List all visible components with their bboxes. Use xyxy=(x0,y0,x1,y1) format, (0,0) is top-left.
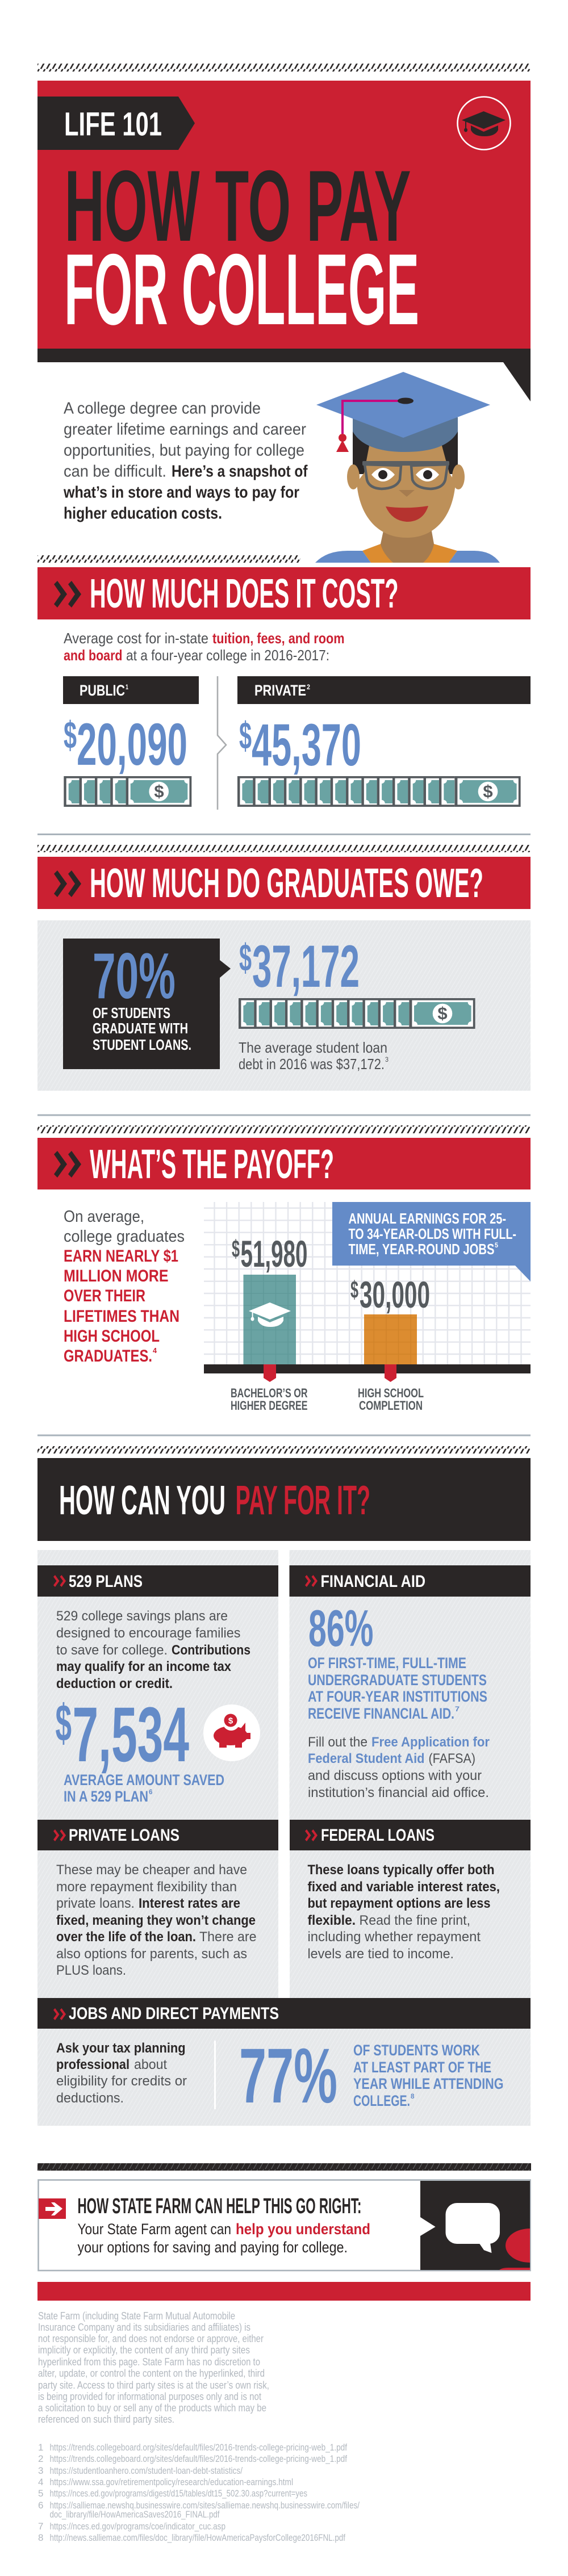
disclaimer: a solicitation to buy or sell any of the products which may be xyxy=(38,2402,266,2414)
payoff statement: 4 xyxy=(153,1346,157,1355)
disclaimer: referenced on such third party sites. xyxy=(38,2414,174,2425)
source list: 2 xyxy=(38,2453,43,2464)
cost description xyxy=(64,630,344,664)
source list: doc_library/file/HowAmericaSaves2016_FINAL.pdf xyxy=(50,2509,220,2520)
source list: https://trends.collegeboard.org/sites/default/files/2016-trends-college-pricing-web_1.pdf xyxy=(50,2453,347,2464)
title xyxy=(64,149,419,346)
axis label: high school xyxy=(358,1386,424,1413)
source list: https://studentloanhero.com/student-loan-debt-statistics/ xyxy=(50,2465,243,2476)
value: 30,000 xyxy=(350,1274,430,1316)
payoff statement: HIGH SCHOOL xyxy=(64,1327,160,1346)
text: FAFSA xyxy=(308,1735,490,1800)
call to action heading: HOW STATE FARM CAN HELP THIS GO RIGHT: xyxy=(77,2194,361,2218)
text: private loans: These may be cheaper and have xyxy=(56,1862,247,1878)
value: 51,980: $ xyxy=(232,1235,240,1263)
callout: annual earnings: TO 34-YEAR-OLDS WITH FULL- xyxy=(349,1225,516,1242)
call to action text: help you understand xyxy=(236,2221,370,2238)
debt caption: debt in 2016 was $37,172. xyxy=(239,1055,385,1073)
intro text xyxy=(63,399,308,522)
text: private loans xyxy=(56,1862,257,1978)
LIFE 101 tag: LIFE 101 xyxy=(64,106,162,143)
footer red bar xyxy=(37,2282,531,2301)
speech bubble block xyxy=(420,2181,530,2270)
heading: private loans: PRIVATE LOANS xyxy=(69,1826,179,1845)
text: private loans: over the life of the loan. xyxy=(56,1929,196,1945)
section heading: pay for it xyxy=(37,1458,531,1541)
intro text: can be difficult. xyxy=(64,462,166,480)
stat: 86 percent: 86% xyxy=(308,1600,374,1657)
text: 529 description: Contributions xyxy=(172,1643,250,1658)
caption: financial aid recipients: RECEIVE FINANCIAL AID. xyxy=(308,1705,454,1722)
baseline and markers xyxy=(204,1364,531,1382)
callout: 70 percent xyxy=(63,939,231,1069)
amount: 7,534: $ xyxy=(56,1694,72,1752)
disclaimer xyxy=(38,2310,269,2425)
intro text: opportunities, but paying for college xyxy=(64,441,304,459)
payoff statement: GRADUATES. xyxy=(64,1347,152,1366)
source list: https://nces.ed.gov/programs/coe/indicator_cuc.asp xyxy=(50,2521,225,2532)
debt amount: $ xyxy=(239,936,252,979)
icon: debt money stack: $ xyxy=(437,1003,448,1023)
source list: http://news.salliemae.com/files/doc_library/file/HowAmericaPaysforCollege2016FNL.pdf xyxy=(50,2532,345,2543)
private label: 2 xyxy=(307,683,310,691)
panel: state farm call to action xyxy=(39,2180,531,2271)
caption: financial aid recipients: UNDERGRADUATE STUDENTS xyxy=(308,1672,487,1689)
bar: high school xyxy=(364,1314,417,1364)
caption: students work xyxy=(353,2042,503,2109)
disclaimer: party site. Access to third party sites is at the user’s own risk, xyxy=(38,2380,269,2391)
text: private loans: PLUS loans. xyxy=(56,1963,126,1978)
text: 529 description: designed to encourage families xyxy=(56,1626,241,1641)
cost description: at a four-year college in 2016-2017: xyxy=(126,647,329,664)
caption: students work: COLLEGE. xyxy=(353,2092,410,2109)
disclaimer: alter, update, or control the content on the hyperlinked, third xyxy=(38,2368,265,2379)
heading: 529 plans xyxy=(37,1565,278,1597)
icon: piggy bank: $ xyxy=(228,1716,233,1726)
heading: federal loans xyxy=(290,1820,531,1850)
icon: piggy bank xyxy=(203,1704,260,1761)
source list: https://nces.ed.gov/programs/digest/d15/tables/dt15_502.30.asp?current=yes xyxy=(50,2488,307,2499)
caption: students work: AT LEAST PART OF THE xyxy=(353,2059,491,2076)
chart grid xyxy=(204,1202,531,1364)
icon: graduation cap in circle xyxy=(458,97,510,150)
text: tax planning: professional xyxy=(56,2057,130,2072)
callout: 70 percent: OF STUDENTS xyxy=(93,1004,170,1021)
section heading: payoff: WHAT’S THE PAYOFF? xyxy=(90,1142,334,1187)
call to action text: Your State Farm agent can xyxy=(77,2221,231,2238)
cost description: and board xyxy=(64,647,123,664)
private label xyxy=(237,676,531,704)
payoff statement: MILLION MORE xyxy=(64,1267,168,1285)
source list xyxy=(38,2442,360,2543)
callout: annual earnings: ANNUAL EARNINGS FOR 25- xyxy=(349,1210,506,1227)
public column xyxy=(63,676,199,807)
text: tax planning xyxy=(56,2041,187,2106)
payoff statement: EARN NEARLY $1 xyxy=(64,1247,178,1266)
debt caption: 3 xyxy=(385,1055,389,1063)
text: tax planning: deductions. xyxy=(56,2091,124,2106)
private amount: $ xyxy=(239,714,252,757)
header panel xyxy=(37,81,531,349)
disclaimer: hyperlinked from this page. State Farm has no discretion to xyxy=(38,2356,260,2368)
callout: annual earnings: 5 xyxy=(495,1241,498,1249)
source list: 6 xyxy=(38,2500,43,2511)
debt amount xyxy=(239,933,360,1000)
text: private loans: There are xyxy=(199,1929,257,1945)
caption: average saved xyxy=(64,1771,224,1805)
intro text: higher education costs. xyxy=(64,504,222,522)
panel: graduate debt xyxy=(37,920,531,1091)
source list: 4 xyxy=(38,2477,43,2487)
amount: 7,534: 7,534 xyxy=(73,1691,189,1778)
text: federal loans: levels are tied to income. xyxy=(308,1946,454,1962)
text: FAFSA: (FAFSA) xyxy=(428,1751,475,1766)
caption: financial aid recipients: AT FOUR-YEAR INSTITUTIONS xyxy=(308,1688,487,1705)
private amount xyxy=(239,712,361,778)
callout: 70 percent: 70% xyxy=(93,940,176,1012)
text: federal loans: including whether repayment xyxy=(308,1929,481,1945)
text: private loans: Interest rates are xyxy=(139,1896,240,1911)
LIFE 101 tag xyxy=(37,97,195,150)
axis label: bachelor's: HIGHER DEGREE xyxy=(231,1398,308,1413)
heading: jobs: JOBS AND DIRECT PAYMENTS xyxy=(69,2004,279,2023)
call to action text xyxy=(77,2221,370,2256)
public label xyxy=(63,676,199,704)
intro text: what’s in store and ways to pay for xyxy=(63,484,299,502)
section heading: pay for it: HOW CAN YOU xyxy=(59,1478,225,1523)
source list: https://www.ssa.gov/retirementpolicy/research/education-earnings.html xyxy=(50,2477,293,2487)
debt caption xyxy=(239,1039,389,1073)
caption: financial aid recipients xyxy=(308,1654,487,1722)
caption: average saved: AVERAGE AMOUNT SAVED xyxy=(64,1771,224,1788)
private label: PRIVATE xyxy=(254,682,306,699)
text: private loans: also options for parents, such as xyxy=(56,1946,247,1962)
caption: average saved: IN A 529 PLAN xyxy=(64,1788,148,1805)
icon: white graduation cap xyxy=(249,1302,291,1327)
caption: students work: OF STUDENTS WORK xyxy=(353,2042,480,2059)
payoff statement xyxy=(64,1208,185,1366)
heading: financial aid: FINANCIAL AID xyxy=(320,1572,425,1591)
panel: 529 plans xyxy=(37,1550,278,1820)
icon: debt money stack xyxy=(239,998,475,1029)
caption: financial aid recipients: 7 xyxy=(455,1705,460,1713)
panel: federal loans xyxy=(290,1820,531,1998)
disclaimer: State Farm (including State Farm Mutual Automobile xyxy=(38,2310,235,2322)
text: FAFSA: institution’s financial aid office. xyxy=(308,1785,489,1800)
text: federal loans: flexible. xyxy=(308,1913,356,1928)
icon: public money stack: $ xyxy=(154,781,164,801)
source list: 7 xyxy=(38,2521,43,2532)
text: federal loans xyxy=(308,1862,500,1962)
cost description: tuition, fees, and room xyxy=(212,630,344,647)
call to action text: your options for saving and paying for college. xyxy=(77,2239,348,2256)
caption: students work: 8 xyxy=(411,2092,415,2100)
disclaimer: not responsible for, and does not endorse or approve, either xyxy=(38,2333,264,2344)
source list: https://salliemae.newshq.businesswire.com/sites/salliemae.newshq.businesswire.com/files/ xyxy=(50,2500,360,2511)
private column xyxy=(237,676,531,807)
heading: private loans xyxy=(37,1820,278,1850)
payoff statement: OVER THEIR xyxy=(64,1287,145,1305)
intro text: greater lifetime earnings and career xyxy=(64,421,306,439)
public label: PUBLIC xyxy=(80,682,125,699)
section heading: pay for it: PAY FOR IT? xyxy=(235,1478,370,1523)
icon: private money stack: $ xyxy=(483,781,493,801)
heading: federal loans: FEDERAL LOANS xyxy=(321,1826,435,1845)
illustration: graduate xyxy=(315,372,500,563)
caption: students work: YEAR WHILE ATTENDING xyxy=(353,2075,503,2092)
decorative hatch top xyxy=(37,64,531,72)
source list: 5 xyxy=(38,2488,43,2499)
payoff statement: On average, xyxy=(64,1208,144,1226)
text: private loans: more repayment flexibility than xyxy=(56,1879,237,1895)
heading: jobs xyxy=(37,1998,531,2029)
private amount: 45,370 xyxy=(252,712,361,778)
text: 529 description: may qualify for an income tax xyxy=(56,1659,232,1674)
panel: jobs and direct payments xyxy=(37,1998,531,2126)
disclaimer: Insurance Company and its subsidiaries and affiliates) is xyxy=(38,2322,250,2333)
text: FAFSA: and discuss options with your xyxy=(308,1768,482,1783)
icon: private money stack xyxy=(237,776,521,807)
callout: 70 percent: STUDENT LOANS. xyxy=(93,1036,191,1053)
axis label: high school: HIGH SCHOOL xyxy=(358,1386,424,1400)
debt caption: The average student loan xyxy=(239,1039,387,1056)
axis label: bachelor's: BACHELOR’S OR xyxy=(231,1386,308,1400)
public label: 1 xyxy=(126,683,128,691)
divider with chevron xyxy=(218,676,226,810)
panel: financial aid xyxy=(290,1550,531,1820)
text: FAFSA: Federal Student Aid xyxy=(308,1751,425,1766)
text: federal loans: These loans typically offer both xyxy=(308,1862,494,1878)
callout: annual earnings xyxy=(332,1202,531,1281)
text: 529 description: 529 college savings plans are xyxy=(56,1609,228,1624)
caption: average saved: 6 xyxy=(149,1788,153,1796)
text: federal loans: Read the fine print, xyxy=(359,1913,470,1928)
value: 51,980 xyxy=(232,1233,308,1275)
disclaimer: implicitly or explicitly, the content of any third party sites xyxy=(38,2344,250,2356)
axis label: high school: COMPLETION xyxy=(359,1398,423,1413)
text: 529 description: deduction or credit. xyxy=(56,1676,173,1691)
public amount: $ xyxy=(64,714,77,757)
value: 30,000: 30,000 xyxy=(360,1274,430,1316)
text: federal loans: but repayment options are less xyxy=(308,1896,491,1911)
decorative hatch intro xyxy=(37,555,300,563)
bar chart: earnings xyxy=(204,1202,531,1413)
source list: 3 xyxy=(38,2465,43,2476)
text: tax planning: about xyxy=(134,2057,167,2072)
public amount: 20,090 xyxy=(77,711,187,778)
intro text: Here’s a snapshot of xyxy=(172,462,308,480)
payoff statement: college graduates xyxy=(64,1228,185,1246)
value: 51,980: 51,980 xyxy=(241,1233,308,1275)
intro text: A college degree can provide xyxy=(64,399,261,417)
debt amount: 37,172 xyxy=(252,933,360,1000)
source list: 8 xyxy=(38,2532,43,2543)
caption: financial aid recipients: OF FIRST-TIME, FULL-TIME xyxy=(308,1654,466,1672)
amount: 7,534 xyxy=(56,1691,189,1778)
text: private loans: private loans. xyxy=(56,1896,135,1911)
source list: https://trends.collegeboard.org/sites/default/files/2016-trends-college-pricing-web_1.pdf xyxy=(50,2442,347,2453)
callout: annual earnings: TIME, YEAR-ROUND JOBS xyxy=(349,1241,494,1258)
text: FAFSA: Free Application for xyxy=(371,1735,490,1750)
cost description: Average cost for in-state xyxy=(64,630,208,647)
panel: private loans xyxy=(37,1820,278,1998)
source list: 1 xyxy=(38,2442,43,2453)
text: 529 description xyxy=(56,1609,250,1691)
bar: bachelor's xyxy=(243,1275,296,1364)
text: tax planning: eligibility for credits or xyxy=(56,2074,187,2089)
disclaimer: is being provided for informational purposes only and is not xyxy=(38,2391,261,2402)
icon: public money stack xyxy=(64,776,191,807)
callout: 70 percent: GRADUATE WITH xyxy=(93,1020,188,1037)
payoff statement: LIFETIMES THAN xyxy=(64,1307,179,1326)
public amount xyxy=(64,711,187,778)
header banner fold xyxy=(37,349,531,401)
text: federal loans: fixed and variable interest rates, xyxy=(308,1879,500,1895)
text: private loans: fixed, meaning they won’t change xyxy=(56,1913,256,1928)
text: FAFSA: Fill out the xyxy=(308,1735,367,1750)
heading: financial aid xyxy=(290,1565,531,1597)
text: 529 description: to save for college. xyxy=(56,1643,168,1658)
heading: 529 plans: 529 PLANS xyxy=(69,1572,143,1591)
stat: 77 percent: 77% xyxy=(239,2033,337,2120)
value: 30,000: $ xyxy=(350,1276,358,1304)
icon: arrow xyxy=(39,2198,66,2219)
axis label: bachelor's xyxy=(231,1386,308,1413)
text: tax planning: Ask your tax planning xyxy=(56,2041,185,2056)
